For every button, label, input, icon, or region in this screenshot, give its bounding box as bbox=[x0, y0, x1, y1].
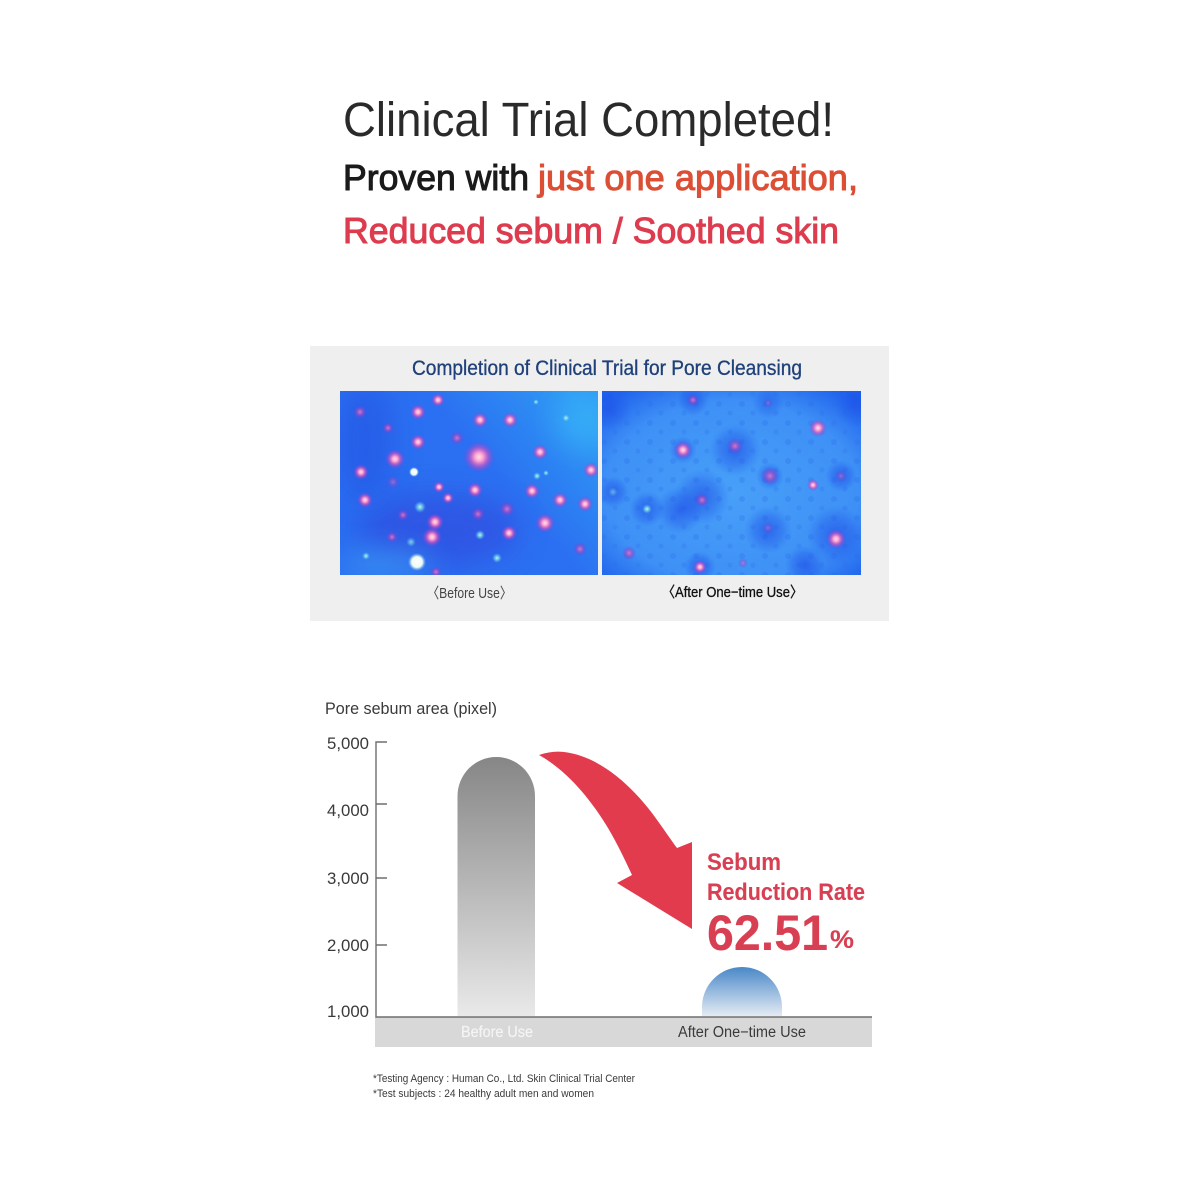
label: before use: Before Use bbox=[461, 1024, 533, 1041]
photo: before use bbox=[340, 391, 598, 575]
callout: reduction rate: Reduction Rate bbox=[707, 879, 865, 906]
footnotes: *Testing Agency : Human Co., Ltd. Skin Clinical Trial Center bbox=[373, 1073, 635, 1085]
title bbox=[343, 94, 858, 251]
chart title: Pore sebum area (pixel) bbox=[325, 699, 497, 718]
y axis labels bbox=[327, 734, 369, 1021]
panel: clinical trial photos bbox=[310, 346, 889, 621]
subheading: proven with just one application: just one application, bbox=[537, 157, 858, 198]
arrow: downward reduction bbox=[539, 752, 692, 929]
heading: clinical trial completed: Clinical Trial Completed! bbox=[343, 94, 834, 147]
label: after one-time use: After One−time Use bbox=[678, 1024, 806, 1041]
subheading: proven with just one application: Proven with bbox=[343, 157, 529, 198]
callout: reduction rate: Sebum bbox=[707, 849, 781, 876]
panel heading: Completion of Clinical Trial for Pore Cleansing bbox=[412, 357, 802, 380]
bar: after one-time use bbox=[702, 967, 782, 1016]
callout: reduction rate: % bbox=[830, 926, 854, 954]
y axis labels: 4,000 bbox=[327, 801, 369, 820]
y axis labels: 1,000 bbox=[327, 1002, 369, 1021]
chart: pore sebum area bbox=[325, 699, 872, 1047]
caption: before use: 〈Before Use〉 bbox=[427, 585, 512, 602]
y axis labels: 3,000 bbox=[327, 869, 369, 888]
caption: after one-time use: 〈After One−time Use〉 bbox=[662, 584, 803, 601]
photo: after one-time use bbox=[602, 391, 861, 575]
subheading: proven with just one application bbox=[343, 157, 858, 198]
subheading: reduced sebum: Reduced sebum / Soothed skin bbox=[343, 210, 839, 251]
axes bbox=[376, 742, 872, 1017]
footnotes: *Test subjects : 24 healthy adult men and women bbox=[373, 1088, 594, 1100]
footnotes bbox=[373, 1073, 635, 1100]
y axis labels: 2,000 bbox=[327, 936, 369, 955]
bar: before use bbox=[458, 757, 535, 1016]
y axis labels: 5,000 bbox=[327, 734, 369, 753]
callout: reduction rate: 62.51 bbox=[707, 905, 828, 961]
callout: reduction rate bbox=[707, 849, 865, 961]
label band bbox=[375, 1017, 872, 1047]
